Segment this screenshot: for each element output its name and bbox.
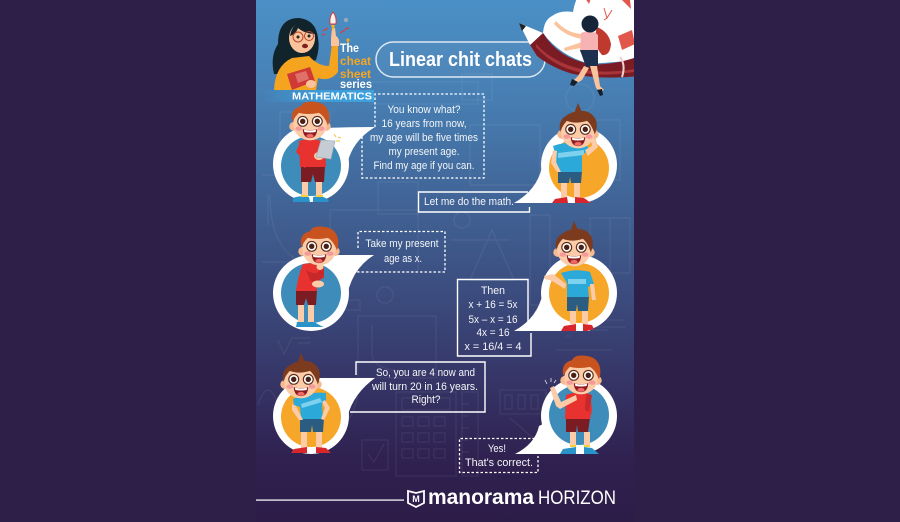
blue circle [281, 136, 341, 196]
speech tail [325, 255, 374, 310]
character 3: boy in red, hand on chin [273, 227, 374, 331]
dialogue 4 speech box with equations [458, 280, 531, 356]
white cloud [543, 0, 640, 64]
dialogue 4 speech box with equations: x + 16 = 5x [468, 299, 518, 311]
faint maths doodles background [258, 74, 630, 476]
header: teacher illustration [273, 18, 339, 90]
white circle [541, 255, 617, 331]
head [553, 221, 595, 266]
character 1: boy in red with tablet [273, 102, 375, 202]
series label: The cheat sheet series [340, 38, 372, 91]
white circle [273, 255, 349, 331]
dialogue 5 speech box [350, 362, 485, 412]
white circle [273, 378, 349, 454]
character 6: boy in red, snapping fingers [515, 356, 617, 454]
dialogue 5 speech box: will turn 20 in 16 years. [371, 381, 478, 393]
shorts [567, 296, 589, 311]
series label: The cheat sheet series: cheat [340, 56, 371, 68]
shirt and arms [299, 139, 326, 167]
shorts [558, 171, 582, 183]
panel background gradient [256, 0, 634, 456]
dialogue 6 speech box: Yes! [488, 443, 506, 455]
boy head [582, 16, 598, 32]
boy arms [554, 21, 583, 39]
shorts [296, 290, 317, 305]
orange circle [281, 387, 341, 447]
white circle [541, 378, 617, 454]
infographic panel [256, 0, 640, 522]
dialogue 5 speech box: So, you are 4 now and [376, 367, 475, 379]
shirt [293, 393, 326, 419]
teacher head [289, 23, 315, 53]
logo: manorama horizon: manorama [428, 486, 534, 509]
legs and shoes [302, 182, 322, 195]
dialogue 4 speech box with equations: x = 16/4 = 4 [464, 341, 522, 353]
legs and shoes [561, 182, 580, 198]
logo: manorama horizon: HORIZON [538, 488, 616, 509]
blue circle [281, 263, 341, 323]
blue circle [549, 385, 609, 445]
dialogue 1 speech box [362, 94, 484, 178]
boy shorts and legs [580, 50, 598, 67]
arm [306, 268, 324, 282]
title pill [376, 42, 545, 77]
head [560, 356, 602, 394]
dialogue 1 speech box: 16 years from now, [382, 118, 466, 130]
head [298, 227, 340, 265]
geometry items [585, 0, 635, 50]
shirt [561, 270, 594, 297]
speech tail [318, 378, 375, 430]
white circle [541, 127, 617, 203]
series label: The cheat sheet series: series [340, 79, 372, 91]
tablet [316, 140, 335, 159]
orange circle [549, 263, 609, 323]
teacher hair [273, 18, 319, 74]
icon: book logo [408, 491, 424, 507]
dialogue 4 speech box with equations: 4x = 16 [476, 327, 510, 339]
shorts [300, 418, 324, 432]
head [289, 102, 331, 140]
legs and shoes [570, 432, 590, 447]
shirt [296, 263, 324, 291]
icon: rocket [322, 12, 349, 35]
head [280, 353, 322, 398]
speech tail [515, 410, 590, 454]
footer rule [256, 499, 404, 501]
title pill: Linear chit chats [389, 49, 532, 71]
arms [292, 404, 303, 420]
legs and shoes [570, 310, 588, 324]
teacher sweater [274, 44, 338, 90]
legs and shoes [298, 305, 314, 322]
dialogue 1 speech box: my age will be five times [370, 132, 478, 144]
dialogue 5 speech box: Right? [412, 394, 440, 406]
legs and shoes [301, 431, 322, 448]
orange circle [549, 138, 609, 198]
speech tail [328, 127, 375, 160]
character 2: boy in blue, hand on head [514, 103, 617, 203]
series label: The cheat sheet series: sheet [340, 69, 371, 81]
character 5: boy in blue, hands on hips [273, 353, 375, 454]
character 4: boy in blue, hand out [514, 221, 617, 331]
Mathematics banner: MATHEMATICS [292, 90, 372, 102]
dialogue 6 speech box [460, 438, 538, 472]
shorts [301, 166, 325, 182]
dialogue 2 speech box: Let me do the math. [424, 196, 514, 208]
pencil [530, 33, 640, 78]
dialogue 3 speech box [358, 232, 445, 272]
dialogue 4 speech box with equations: Then [481, 285, 505, 297]
head [557, 103, 599, 148]
header: boy riding a pencil [519, 0, 640, 96]
logo: manorama horizon: M [412, 494, 420, 504]
logo: manorama horizon [408, 486, 616, 509]
speech tail [514, 290, 590, 331]
dialogue 3 speech box: Take my present [366, 238, 438, 250]
shirt [565, 392, 592, 419]
dialogue 4 speech box with equations: 5x – x = 16 [468, 314, 518, 326]
arms [551, 150, 561, 172]
dialogue 1 speech box: Find my age if you can. [374, 160, 474, 172]
red book [287, 67, 315, 90]
series label: The cheat sheet series: The [340, 43, 359, 55]
arms [544, 274, 566, 289]
speech tail [514, 169, 590, 203]
dialogue 3 speech box: age as x. [384, 253, 422, 265]
shirt [553, 142, 589, 172]
dialogue 6 speech box: That's correct. [465, 457, 533, 469]
dialogue 2 speech box [418, 192, 530, 212]
dialogue 1 speech box: You know what? [388, 104, 460, 116]
red backpack [595, 27, 611, 55]
dialogue 1 speech box: my present age. [388, 146, 460, 158]
pointing hand [331, 28, 339, 46]
boy shirt [580, 31, 598, 52]
shorts [566, 418, 590, 432]
white circle [273, 126, 349, 202]
